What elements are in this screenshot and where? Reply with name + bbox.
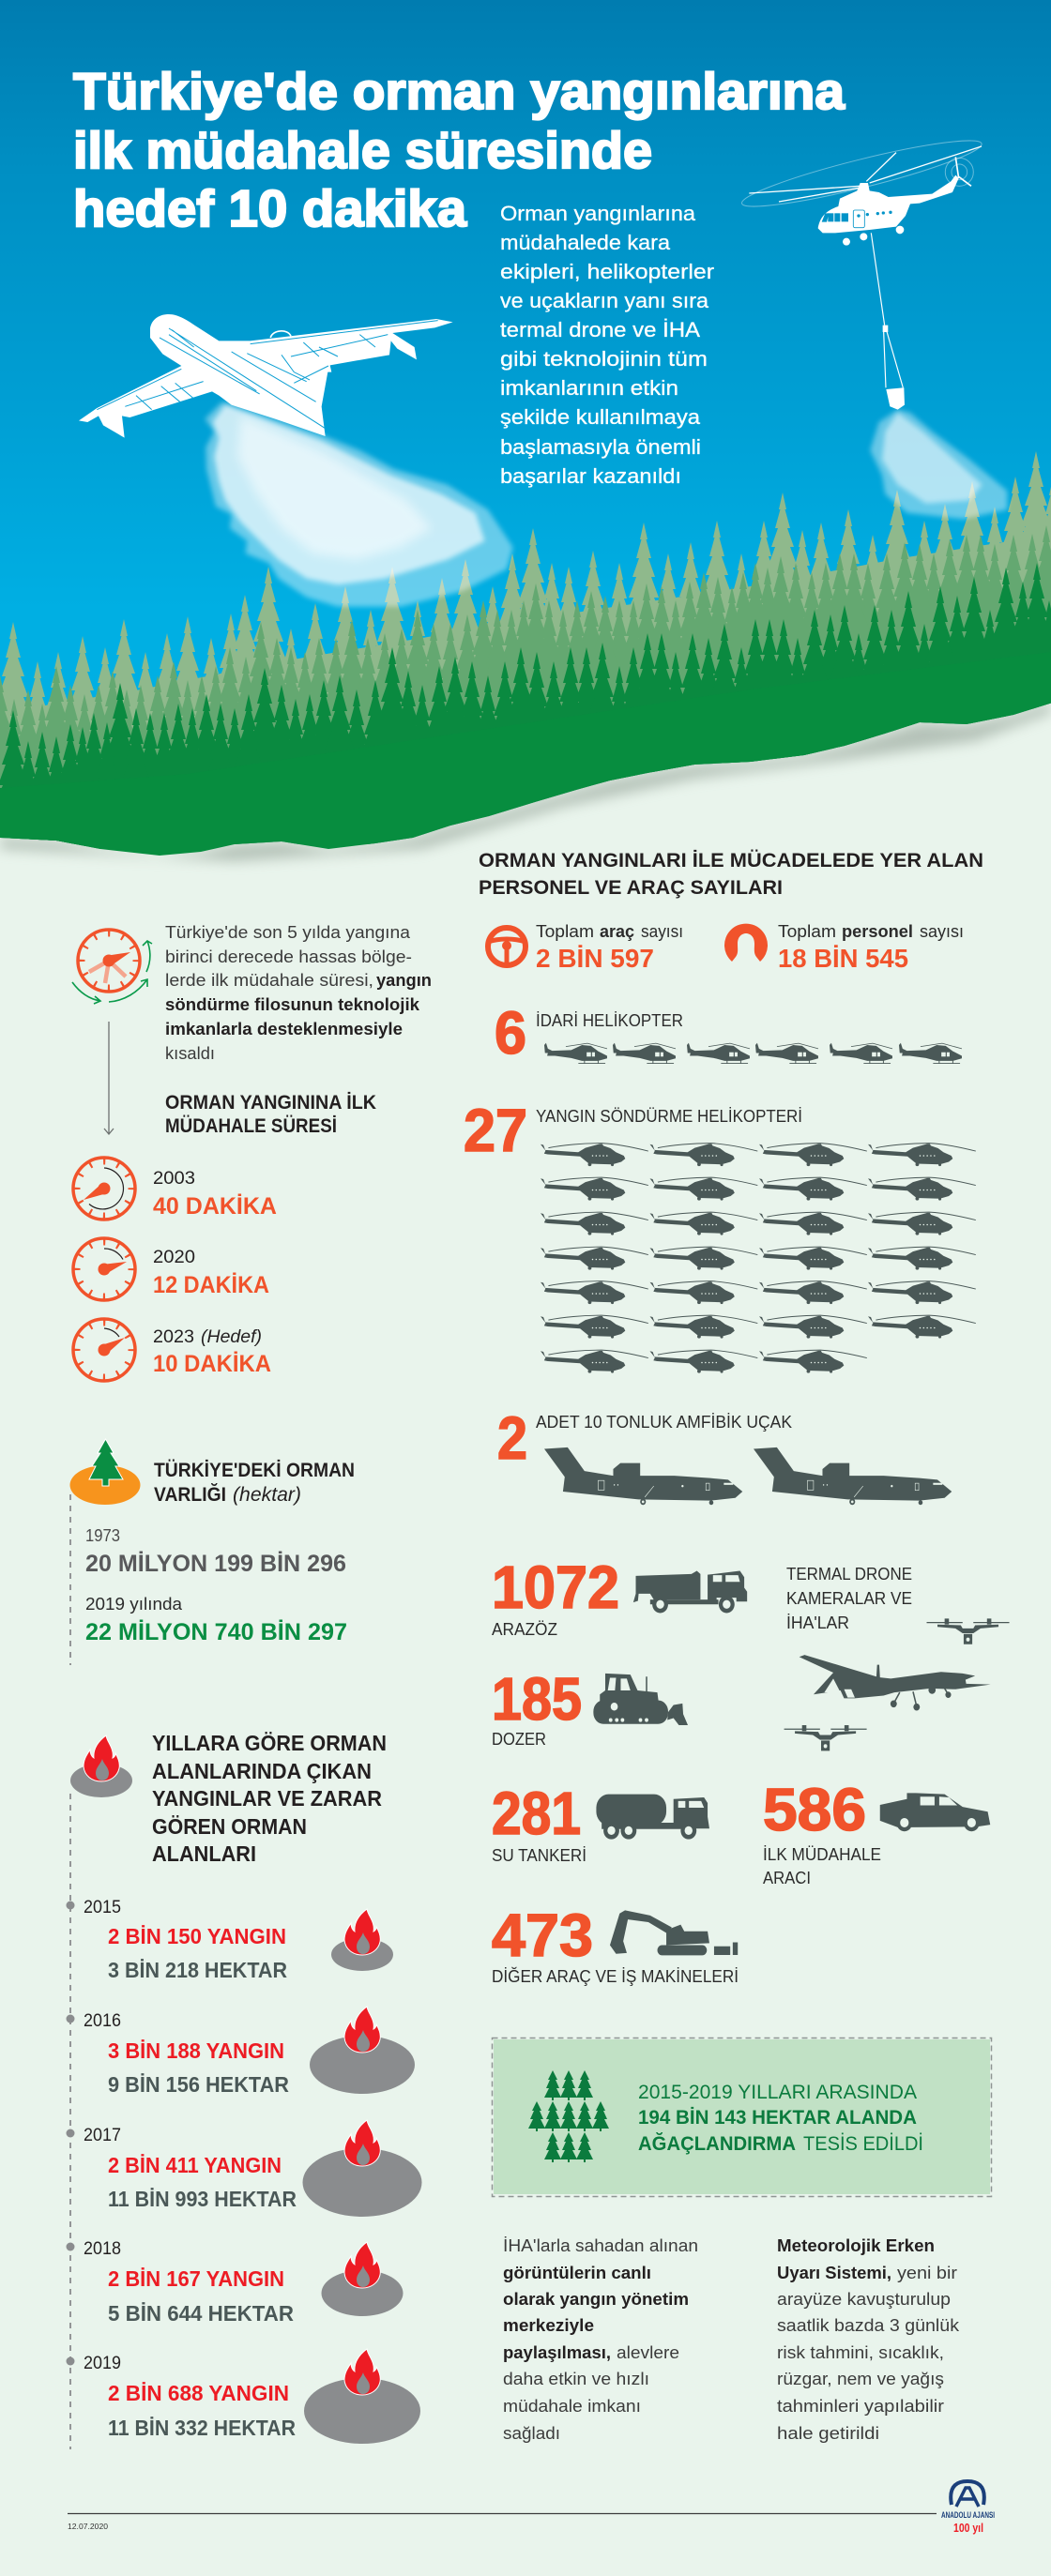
panel: response time xyxy=(72,923,432,1381)
year row: 2018: 2 BİN 167 YANGIN xyxy=(108,2266,284,2291)
stat: 2019: 2019 yılında xyxy=(85,1595,183,1614)
year row: 2016 xyxy=(66,2007,415,2097)
footer rule xyxy=(68,2512,937,2514)
heading: fires by year: ALANLARI xyxy=(152,1841,256,1866)
intro text: şekilde kullanılmaya xyxy=(500,405,701,429)
stat: 2 amphibious planes: ADET 10 TONLUK AMFİBİK UÇAK xyxy=(536,1413,792,1432)
year row: 2018: 5 BİN 644 HEKTAR xyxy=(108,2301,294,2326)
stat: total vehicles: sayısı xyxy=(641,922,683,941)
timer row: 2023 target: (Hedef) xyxy=(201,1327,262,1347)
water plume from plane xyxy=(205,402,513,607)
callout text: 194 BİN 143 HEKTAR ALANDA xyxy=(638,2107,917,2129)
description text: yangın xyxy=(376,971,432,990)
stat: total personnel: personel xyxy=(842,922,913,941)
year row: 2016: 2016 xyxy=(84,2011,121,2031)
text block: UAV footage: merkeziyle xyxy=(503,2316,594,2335)
timer row: 2020 xyxy=(73,1238,269,1300)
heading: fires by year: YILLARA GÖRE ORMAN xyxy=(152,1731,387,1755)
stat: 473 other machinery: DİĞER ARAÇ VE İŞ MAKİNELERİ xyxy=(492,1966,739,1986)
stat: 185 dozers: 185 xyxy=(492,1665,582,1733)
arrow down xyxy=(104,1022,114,1134)
icon: flame on gray ground xyxy=(70,1735,132,1797)
stat: 2 amphibious planes xyxy=(497,1404,952,1505)
description text: lerde ilk müdahale süresi, xyxy=(165,971,373,990)
year row: 2015: 2 BİN 150 YANGIN xyxy=(108,1924,286,1948)
year row: 2015: 3 BİN 218 HEKTAR xyxy=(108,1958,287,1982)
year row: 2017 xyxy=(66,2120,422,2217)
stat: 6 admin helicopters xyxy=(495,999,962,1067)
stat: thermal drones and UAVs: KAMERALAR VE xyxy=(786,1589,912,1608)
stat: total vehicles xyxy=(488,922,683,973)
year row: 2017: 2017 xyxy=(84,2126,121,2145)
stat: 586 first response vehicles: 586 xyxy=(763,1776,866,1843)
stat: total personnel xyxy=(724,922,964,973)
heading: personnel and vehicles: PERSONEL VE ARAÇ SAYILARI xyxy=(479,877,783,899)
torn edge shadow xyxy=(0,702,1051,861)
forest front tree layer and ground xyxy=(0,563,1051,863)
stat: total personnel: Toplam xyxy=(778,922,836,941)
text block: UAV footage: görüntülerin canlı xyxy=(503,2264,651,2282)
forest far tree layer xyxy=(0,451,1051,844)
text block: early warning system: yeni bir xyxy=(897,2264,957,2282)
text block: UAV footage: daha etkin ve hızlı xyxy=(503,2370,649,2388)
year row: 2017: 2 BİN 411 YANGIN xyxy=(108,2153,282,2177)
stat: 2 amphibious planes: 2 xyxy=(497,1404,527,1472)
description text: imkanlarla desteklenmesiyle xyxy=(165,1020,403,1038)
year row: 2019: 2019 xyxy=(84,2354,121,2373)
text block: early warning system: tahminleri yapılabilir xyxy=(777,2397,944,2416)
text block: early warning system: rüzgar, nem ve yağış xyxy=(777,2370,944,2388)
year row: 2018: 2018 xyxy=(84,2239,121,2259)
text block: UAV footage xyxy=(503,2236,698,2443)
heading: personnel and vehicles: ORMAN YANGINLARI İLE MÜCADELEDE YER ALAN xyxy=(479,850,983,871)
logo: Anadolu Ajansi xyxy=(941,2481,995,2535)
stat: 185 dozers: DOZER xyxy=(492,1730,546,1749)
stat: total personnel: 18 BİN 545 xyxy=(778,944,908,973)
text block: early warning system: arayüze kavuşturulup xyxy=(777,2290,951,2309)
text block: early warning system xyxy=(777,2236,960,2443)
panel: personnel and vehicles xyxy=(464,850,1010,1986)
stat: 1973: 20 MİLYON 199 BİN 296 xyxy=(85,1551,346,1577)
stat: 281 water tankers xyxy=(492,1780,709,1865)
description text: Türkiye'de son 5 yılda yangına xyxy=(165,923,411,942)
intro text: gibi teknolojinin tüm xyxy=(500,347,708,371)
heading: forest area: (hektar) xyxy=(233,1484,301,1506)
panel: fires by year xyxy=(66,1731,422,2449)
intro text: imkanlarının etkin xyxy=(500,376,678,400)
icon: main clock with rotating arrows xyxy=(72,930,152,1004)
stat: thermal drones and UAVs: İHA'LAR xyxy=(786,1614,849,1632)
callout text: AĞAÇLANDIRMA xyxy=(638,2132,796,2155)
intro text: ekipleri, helikopterler xyxy=(500,260,714,283)
text block: early warning system: Uyarı Sistemi, xyxy=(777,2264,891,2282)
year row: 2018 xyxy=(66,2239,404,2326)
heading: fires by year: GÖREN ORMAN xyxy=(152,1814,307,1839)
forest middle tree layer xyxy=(0,525,1051,844)
icon: group of trees xyxy=(528,2070,609,2162)
timer row: 2003: 2003 xyxy=(153,1169,195,1189)
icon: firefighting plane xyxy=(79,314,453,438)
description text: söndürme filosunun teknolojik xyxy=(165,995,420,1014)
text block: UAV footage: paylaşılması, xyxy=(503,2343,611,2362)
logo: Anadolu Ajansi: 100 yıl xyxy=(953,2521,983,2535)
heading: first response time: MÜDAHALE SÜRESİ xyxy=(165,1115,337,1137)
text block: UAV footage: İHA'larla sahadan alınan xyxy=(503,2236,698,2255)
footer date: 12.07.2020 xyxy=(68,2522,108,2531)
stat: thermal drones and UAVs: TERMAL DRONE xyxy=(786,1565,912,1583)
stat: 1072 fire trucks: 1072 xyxy=(492,1553,619,1621)
timer row: 2023 target: 10 DAKİKA xyxy=(153,1351,271,1377)
stat: 281 water tankers: SU TANKERİ xyxy=(492,1846,586,1865)
description text xyxy=(165,923,432,1063)
timer row: 2020: 2020 xyxy=(153,1248,195,1267)
timer row: 2023 target: 2023 xyxy=(153,1327,194,1347)
intro text: ve uçakların yanı sıra xyxy=(500,289,709,312)
stat: 281 water tankers: 281 xyxy=(492,1780,581,1847)
title: hedef 10 dakika xyxy=(73,179,466,237)
year row: 2015: 2015 xyxy=(84,1898,121,1917)
stat: total vehicles: 2 BİN 597 xyxy=(536,944,654,973)
stat: 473 other machinery xyxy=(492,1902,739,1986)
year row: 2019: 2 BİN 688 YANGIN xyxy=(108,2381,289,2405)
year row: 2017: 11 BİN 993 HEKTAR xyxy=(108,2187,297,2211)
timer row: 2003 xyxy=(73,1158,277,1220)
panel: forest area xyxy=(69,1439,355,1665)
intro text: başarılar kazanıldı xyxy=(500,464,681,488)
heading: first response time xyxy=(165,1092,376,1137)
heading: fires by year: YANGINLAR VE ZARAR xyxy=(152,1786,382,1811)
heading: forest area: VARLIĞI xyxy=(154,1483,226,1506)
year row: 2019: 11 BİN 332 HEKTAR xyxy=(108,2416,296,2440)
timer row: 2003: 40 DAKİKA xyxy=(153,1193,277,1220)
description text: birinci derecede hassas bölge- xyxy=(165,947,412,966)
text block: UAV footage: müdahale imkanı xyxy=(503,2397,641,2416)
callout text: 2015-2019 YILLARI ARASINDA xyxy=(638,2082,917,2103)
stat: 586 first response vehicles: İLK MÜDAHALE xyxy=(763,1845,881,1864)
year row: 2016: 3 BİN 188 YANGIN xyxy=(108,2038,284,2063)
stat: 1973: 1973 xyxy=(85,1526,120,1545)
stat: 1072 fire trucks xyxy=(492,1553,747,1639)
heading: forest area xyxy=(154,1460,355,1506)
title xyxy=(73,62,845,237)
water plume from helicopter xyxy=(870,410,1007,519)
stat: total personnel: sayısı xyxy=(920,922,964,941)
stat: total vehicles: Toplam xyxy=(536,922,594,941)
stat: 6 admin helicopters: 6 xyxy=(495,999,526,1067)
timer row: 2023 target xyxy=(73,1319,271,1381)
text block: early warning system: hale getirildi xyxy=(777,2424,879,2443)
heading: fires by year: ALANLARINDA ÇIKAN xyxy=(152,1759,372,1783)
callout: afforestation xyxy=(492,2038,991,2197)
title: Türkiye'de orman yangınlarına xyxy=(73,62,845,120)
text block: UAV footage: olarak yangın yönetim xyxy=(503,2290,689,2309)
heading: personnel and vehicles xyxy=(479,850,983,899)
text block: early warning system: risk tahmini, sıcaklık, xyxy=(777,2343,944,2362)
text block: UAV footage: sağladı xyxy=(503,2424,560,2443)
stat: 473 other machinery: 473 xyxy=(492,1902,593,1969)
stat: thermal drones and UAVs xyxy=(784,1565,1010,1750)
stat: 185 dozers xyxy=(492,1665,688,1749)
stat: 27 firefighting helicopters xyxy=(464,1097,976,1373)
callout text xyxy=(638,2082,923,2155)
logo: Anadolu Ajansi: ANADOLU AJANSI xyxy=(941,2510,995,2520)
intro text: termal drone ve İHA xyxy=(500,318,700,341)
stat: 6 admin helicopters: İDARİ HELİKOPTER xyxy=(536,1011,683,1030)
year row: 2015 xyxy=(66,1898,393,1982)
callout text: TESİS EDİLDİ xyxy=(803,2133,923,2155)
description text: kısaldı xyxy=(165,1044,215,1063)
stat: total vehicles: araç xyxy=(600,922,634,941)
year row: 2016: 9 BİN 156 HEKTAR xyxy=(108,2072,289,2097)
stat: 1072 fire trucks: ARAZÖZ xyxy=(492,1620,557,1639)
intro text xyxy=(500,202,714,488)
stat: 586 first response vehicles xyxy=(763,1776,990,1887)
stat: 586 first response vehicles: ARACI xyxy=(763,1869,811,1887)
timer row: 2020: 12 DAKİKA xyxy=(153,1272,269,1298)
year row: 2019 xyxy=(66,2349,420,2444)
stat: 2019: 22 MİLYON 740 BİN 297 xyxy=(85,1619,347,1645)
intro text: başlamasıyla önemli xyxy=(500,435,701,459)
title: ilk müdahale süresinde xyxy=(73,121,652,179)
heading: forest area: TÜRKİYE'DEKİ ORMAN xyxy=(154,1460,355,1481)
intro text: Orman yangınlarına xyxy=(500,202,696,225)
stat: 1973 xyxy=(85,1526,346,1577)
text block: early warning system: Meteorolojik Erken xyxy=(777,2236,935,2255)
icon: tree on orange ground xyxy=(69,1439,141,1665)
hero sky background xyxy=(0,0,1051,844)
stat: 27 firefighting helicopters: YANGIN SÖNDÜRME HELİKOPTERİ xyxy=(536,1107,802,1126)
stat: 27 firefighting helicopters: 27 xyxy=(464,1097,527,1164)
intro text: müdahalede kara xyxy=(500,231,671,254)
text block: early warning system: saatlik bazda 3 günlük xyxy=(777,2316,960,2335)
icon: helicopter with water bucket xyxy=(739,130,985,410)
heading: first response time: ORMAN YANGININA İLK xyxy=(165,1092,376,1114)
heading: fires by year xyxy=(152,1731,387,1866)
text block: UAV footage: alevlere xyxy=(617,2343,679,2362)
timeline line xyxy=(69,1794,71,2449)
stat: 2019 xyxy=(85,1595,347,1645)
